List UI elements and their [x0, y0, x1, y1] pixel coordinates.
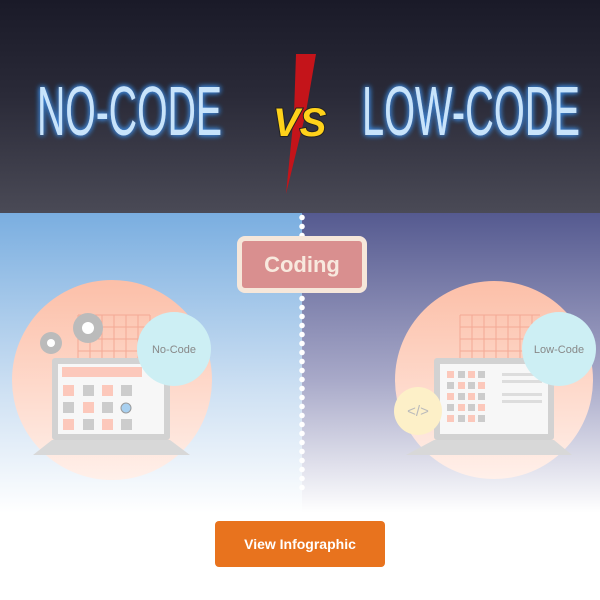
illustration: no-code: No-Code — [152, 344, 196, 356]
button: view infographic — [215, 521, 385, 567]
title: no-code: NO-CODE — [37, 72, 222, 150]
button: view infographic: View Infographic — [244, 536, 356, 552]
right panel background — [302, 213, 600, 513]
icon: vs lightning: VS — [273, 101, 327, 145]
illustration: no-code — [12, 280, 212, 480]
coding label: Coding — [264, 252, 340, 277]
coding label — [237, 236, 367, 293]
illustration: low-code: </> — [407, 403, 429, 420]
header background — [0, 0, 600, 213]
left panel background — [0, 213, 302, 513]
illustration: low-code — [394, 281, 596, 479]
titles — [35, 72, 583, 150]
illustration: low-code: Low-Code — [534, 344, 584, 356]
icon: vs lightning — [273, 54, 327, 194]
dotted divider — [299, 213, 305, 493]
